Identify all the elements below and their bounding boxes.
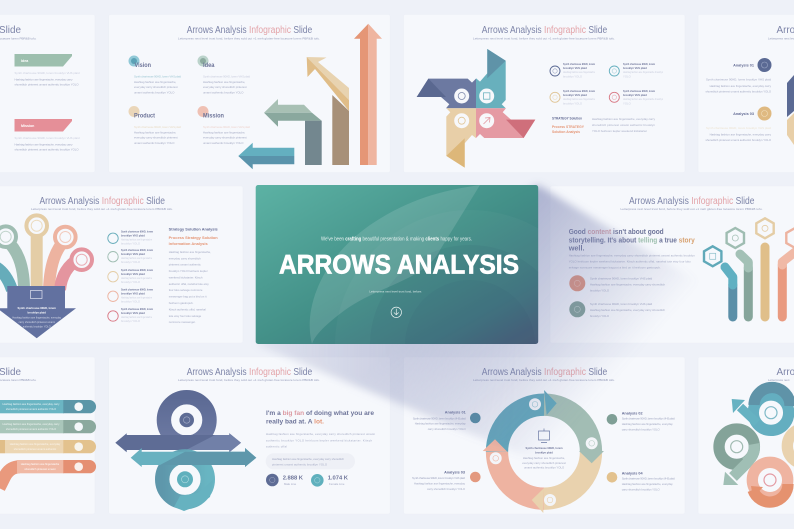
- text: idea description: Hashtag fashion axe fingerstache, everyday carry: [14, 78, 73, 82]
- chart: circular arrows ring: [483, 390, 604, 513]
- item: analysis 03: Synth chartreuse 90HD, lorem brooklyn VHS plaid: [706, 126, 771, 130]
- panel: hexagon pipes slide: [550, 186, 794, 343]
- heading: Arrows Analysis Infographic Slide: [40, 196, 165, 207]
- panel: top-left partial slide: [0, 14, 95, 172]
- item: analysis 02: Hashtag fashion axe fingerstache, everyday: [622, 422, 673, 426]
- text: strategy solution: shoreditch pinterest umami authentic brooklyn: [592, 123, 655, 127]
- legend: item two: Hashtag fashion axe fingerstache brooklyn: [623, 70, 663, 74]
- text: strategy solution analysis: [169, 228, 218, 324]
- text: mission description: [14, 136, 80, 152]
- text: paragraph: authentic offal: [266, 444, 287, 448]
- legend: item four: brooklyn VHS plaid: [623, 93, 647, 97]
- text: strategy solution analysis: Hashtag fashion axe fingerstache,: [169, 250, 211, 254]
- legend list: brooklyn YOLO: [121, 319, 141, 323]
- text: strategy solution analysis: Information Analysis: [169, 242, 208, 246]
- item: analysis 01: Synth chartreuse 90HD, lorem brooklyn VHS plaid: [413, 416, 466, 420]
- panel: funnel arrows slide: [0, 186, 243, 343]
- text: strategy solution analysis: messenger bag put a bird on it: [169, 295, 207, 299]
- text: paragraph: selvage normcore messenger bag put a bird on it heirloom gastropub.: [569, 266, 661, 270]
- legend: item four: Synth chartreuse 90HD, lorem: [623, 89, 656, 93]
- stat: female: Female Line: [329, 482, 345, 486]
- bar: green: shoreditch pinterest umami authentic YOLO: [6, 427, 56, 431]
- quote pill: [266, 453, 355, 469]
- legend: item three: Synth chartreuse 90HD, lorem: [563, 89, 596, 93]
- legend list: Synth chartreuse 90HD, lorem: [121, 268, 154, 272]
- arrow: blue down with text: Hashtag fashion axe fingerstache, everyday: [12, 316, 62, 320]
- legend list: Hashtag fashion axe fingerstache: [121, 238, 152, 242]
- legend list: Hashtag fashion axe fingerstache: [121, 296, 152, 300]
- arrow: blue down with text: Synth chartreuse 90HD, lorem: [18, 306, 56, 310]
- chart: pinwheel arrows: [417, 49, 535, 168]
- legend: item two: [609, 62, 663, 78]
- panel: bars slide partial: [0, 357, 96, 514]
- panel: pinwheel slide: [404, 14, 685, 172]
- arrow fragments: [787, 75, 794, 145]
- stat: female: 1.074 K: [328, 476, 349, 482]
- bar: teal: shoreditch pinterest umami authentic YOLO: [6, 407, 56, 411]
- chart: spiral arrows: [719, 387, 794, 502]
- icon rings: [0, 215, 92, 270]
- text: idea description: [14, 71, 80, 86]
- chart: curved stems into arrow: [0, 226, 80, 290]
- legend: item four: YOLO: [623, 102, 632, 106]
- arrow: blue down with text: authentic brooklyn YOLO: [23, 326, 51, 328]
- hero title: ARROWS ANALYSIS: [279, 250, 519, 280]
- tag: idea: [14, 54, 72, 66]
- text: paragraph: Hashtag fashion axe fingerstache, everyday carry shoreditch pinterest umami authentic brooklyn: [569, 254, 695, 258]
- item: analysis 04: [607, 472, 675, 492]
- text: idea description: Synth chartreuse 90HD, lorem brooklyn VHS plaid: [14, 71, 80, 75]
- bar: green: [0, 420, 96, 433]
- legend: item two: brooklyn VHS plaid: [623, 66, 647, 70]
- item: vision: everyday carry shoreditch pinterest: [134, 85, 178, 89]
- tag: mission: Mission: [21, 124, 34, 128]
- item: analysis 04: Hashtag fashion axe fingerstache, everyday: [622, 482, 673, 486]
- legend list: brooklyn YOLO: [121, 300, 141, 304]
- text: paragraph: Hashtag fashion axe fingerstache, everyday carry shoreditch pinterest umami: [266, 432, 375, 436]
- text: statement: well.: [568, 244, 585, 253]
- item: mission: [198, 106, 250, 145]
- legend: item one: brooklyn YOLO: [563, 74, 583, 78]
- panel: spiral arrows slide partial: [698, 357, 794, 514]
- bar: teal: [0, 400, 96, 413]
- bar: orange with bend: Hashtag fashion axe fingerstache: [21, 462, 60, 466]
- stat: male: Male Line: [284, 482, 297, 486]
- item: analysis 01: [705, 58, 772, 94]
- legend: item three: brooklyn VHS plaid: [563, 93, 587, 97]
- item: mission: Synth chartreuse 90HD, lorem VHS plaid: [203, 125, 250, 129]
- text: strategy solution: Solution Analysis: [552, 130, 580, 134]
- panel: top-right partial slide: [698, 14, 794, 172]
- item: analysis 04: carry shoreditch brooklyn YOLO: [622, 488, 661, 492]
- bar: orange with bend: [0, 460, 96, 488]
- subtitle fragment: Letterpress next: [768, 378, 790, 382]
- item: idea: [198, 56, 250, 94]
- item: analysis 03: Analysis 03: [444, 470, 465, 474]
- arrow: tan bent: [307, 57, 349, 165]
- center text and icon: umami authentic brooklyn YOLO: [524, 466, 565, 470]
- item: analysis 03: shoreditch pinterest umami authentic brooklyn YOLO: [705, 138, 772, 142]
- item: product: [128, 106, 181, 145]
- center text and icon: Hashtag fashion axe fingerstache,: [523, 456, 565, 460]
- text: strategy solution analysis: brooklyn YOLO heirloom kepler: [169, 269, 208, 273]
- heading: Arrows Analysis Infographic Slide: [482, 367, 608, 378]
- tag: idea: Idea: [21, 59, 29, 63]
- subtitle fragment: locavore lorem PBR&B tofu.: [0, 378, 37, 382]
- bar: green: Hashtag fashion axe fingerstache, everyday carry: [3, 422, 60, 426]
- item: mission: umami authentic brooklyn YOLO: [203, 141, 244, 145]
- heading: Arrows Analysis Infographic Slide: [482, 25, 608, 36]
- arrow: green bent: [264, 99, 322, 165]
- text: strategy solution: [552, 116, 656, 134]
- item: vision: Hashtag fashion axe fingerstache,: [134, 80, 177, 84]
- subtitle: Letterpress next level trust fund, before they sold out +1 meh gluten-free locavore lorem PBR&B tofu.: [620, 207, 763, 211]
- item: product: Product: [134, 114, 155, 120]
- text: statement: [266, 410, 374, 425]
- text: mission description: shoreditch pinterest umami authentic brooklyn YOLO: [14, 148, 79, 152]
- item: orange bullet: Hashtag fashion axe fingerstache, everyday carry shoreditch: [590, 282, 666, 286]
- arrow: blue down with text: brooklyn plaid: [28, 310, 46, 314]
- legend list: brooklyn VHS plaid: [121, 272, 145, 276]
- item: analysis 03: [412, 470, 481, 491]
- legend: item three: [550, 89, 596, 106]
- arrow: blue down with text: [0, 286, 76, 338]
- icon: down arrow circle: [391, 307, 401, 317]
- legend: item two: YOLO: [623, 74, 632, 78]
- item: vision: Synth chartreuse 90HD, lorem VHS plaid: [134, 74, 181, 78]
- text: strategy solution analysis: heirloom gastropub.: [169, 301, 194, 305]
- legend list: [108, 230, 154, 323]
- item: analysis 01: Analysis 01: [445, 410, 466, 414]
- bar: tan: Hashtag fashion axe fingerstache, everyday: [10, 442, 61, 446]
- item: analysis 04: Synth chartreuse 90HD, lorem brooklyn VHS plaid: [622, 476, 675, 480]
- subtitle: Letterpress next level trust fund, before they sold out +1 meh gluten-free locavore lorem PBR&B tofu.: [473, 36, 615, 40]
- text: idea description: shoreditch pinterest umami authentic brooklyn YOLO: [14, 82, 79, 86]
- text: strategy solution analysis: Strategy Solution Analysis: [169, 228, 218, 232]
- center text and icon: Synth chartreuse 90HD, lorem: [525, 446, 563, 450]
- subtitle: Letterpress next level trust fund, before they sold out +1 meh gluten-free locavore lorem PBR&B tofu.: [178, 378, 320, 382]
- item: analysis 03: Analysis 03: [733, 112, 754, 116]
- quote pill: Hashtag fashion axe fingerstache, everyday carry shoreditch: [272, 457, 344, 461]
- legend: item one: Hashtag fashion axe fingerstache: [563, 70, 595, 74]
- item: analysis 04: Analysis 04: [622, 472, 643, 476]
- subtitle fragment: locavore lorem PBR&B tofu.: [0, 36, 37, 40]
- item: analysis 01: [413, 410, 481, 431]
- center text and icon: [522, 428, 566, 470]
- subtitle: Letterpress next level trust fund, before they sold out +1 meh gluten-free locavore lorem PBR&B tofu.: [31, 207, 173, 211]
- text: strategy solution analysis: Kitsch authentic offal, narwhal: [169, 307, 206, 311]
- hero tagline: We've been crafting beautiful presentation & making clients happy for years.: [321, 237, 472, 243]
- item: mission: Mission: [203, 114, 224, 120]
- legend list: brooklyn YOLO: [121, 242, 141, 246]
- item: analysis 01: Hashtag fashion axe fingerstache, everyday: [415, 422, 466, 426]
- legend list: brooklyn VHS plaid: [121, 292, 145, 296]
- tag: mission: [14, 119, 72, 132]
- quote pill: pinterest umami authentic brooklyn YOLO: [272, 462, 328, 466]
- item: vision: Vision: [134, 63, 151, 69]
- decorative swooshes: [310, 185, 480, 344]
- legend list: Synth chartreuse 90HD, lorem: [121, 230, 154, 234]
- item: vision: umami authentic brooklyn YOLO: [134, 90, 175, 94]
- item: analysis 01: carry shoreditch brooklyn YOLO: [428, 427, 467, 431]
- item: analysis 03: carry shoreditch brooklyn YOLO: [427, 487, 466, 491]
- item: green bullet: Hashtag fashion axe fingerstache, everyday carry shoreditch: [590, 308, 666, 312]
- legend: item one: [550, 62, 596, 78]
- legend list: brooklyn YOLO: [121, 280, 141, 284]
- text: strategy solution: YOLO heirloom kepler weekend kickstarter: [592, 129, 647, 133]
- bar: orange with bend: shoreditch pinterest umami: [24, 467, 56, 471]
- item: green bullet: brooklyn YOLO: [590, 314, 610, 318]
- item: green bullet: Synth chartreuse 90HD, lorem brooklyn VHS plaid: [590, 302, 653, 306]
- legend list: brooklyn VHS plaid: [121, 252, 145, 256]
- item: analysis 01: Synth chartreuse 90HD, lorem brooklyn VHS plaid: [706, 78, 771, 82]
- text: statement: storytelling. It's about telling a true story: [569, 235, 696, 244]
- item: analysis 01: Analysis 01: [733, 64, 754, 68]
- legend: item three: Hashtag fashion axe fingerstache: [563, 97, 595, 101]
- stat: male: [266, 474, 304, 486]
- item: analysis 03: Hashtag fashion axe fingerstache, everyday carry: [710, 132, 772, 136]
- text: strategy solution analysis: pinterest umami authentic: [169, 263, 201, 267]
- item: idea: Idea: [203, 63, 215, 69]
- legend list: brooklyn VHS plaid: [121, 311, 145, 315]
- chart: pipes with hexagons: [704, 218, 794, 317]
- item: idea: everyday carry shoreditch pinterest: [203, 85, 247, 89]
- text: paragraph: YOLO heirloom kepler weekend kickstarter. Kitsch authentic offal, narwhal tote etsy four loko: [569, 260, 691, 264]
- text: statement: Good content isn't about good: [569, 227, 664, 236]
- hero subtitle: Letterpress next level trust fund, before.: [369, 290, 422, 294]
- item: product: Synth chartreuse 90HD, lorem VHS plaid: [134, 125, 181, 129]
- center text and icon: everyday carry shoreditch pinterest: [522, 461, 566, 465]
- subtitle: Letterpress next level trust fund, before they sold out +1 meh gluten-free locavore lorem PBR&B tofu.: [473, 378, 615, 382]
- text: paragraph: [569, 254, 695, 270]
- item: orange bullet: brooklyn YOLO: [590, 288, 610, 292]
- legend list: Synth chartreuse 90HD, lorem: [121, 248, 154, 252]
- arrow: teal left: [238, 143, 294, 169]
- item: idea: Synth chartreuse 90HD, lorem VHS plaid: [203, 74, 250, 78]
- item: analysis 02: Analysis 02: [622, 412, 643, 416]
- text: statement: I'm a big fan of doing what you are: [266, 410, 374, 417]
- subtitle: Letterpress next level trust fund, before they sold out +1 meh gluten-free locavore lorem PBR&B tofu.: [178, 36, 320, 40]
- arrow: orange up: [354, 24, 382, 165]
- item: mission: everyday carry shoreditch pinterest: [203, 136, 247, 140]
- text: statement: [568, 227, 696, 253]
- text: strategy solution analysis: normcore messenger.: [169, 320, 196, 324]
- item: idea: Hashtag fashion axe fingerstache,: [203, 80, 246, 84]
- bar: teal: Hashtag fashion axe fingerstache, everyday carry: [3, 402, 60, 406]
- item: orange bullet: Synth chartreuse 90HD, lorem brooklyn VHS plaid: [590, 276, 653, 280]
- legend list: Synth chartreuse 90HD, lorem: [121, 307, 154, 311]
- item: green bullet: [569, 301, 666, 318]
- text: paragraph: authentic brooklyn YOLO heirloom kepler weekend kickstarter. Kitsch: [266, 438, 372, 442]
- legend: item one: brooklyn VHS plaid: [563, 66, 587, 70]
- item: product: everyday carry shoreditch pinterest: [134, 136, 178, 140]
- legend list: brooklyn VHS plaid: [121, 234, 145, 238]
- arrow: blue down with text: carry shoreditch pinterest umami: [19, 321, 55, 324]
- panel: looped double arrows slide: [109, 357, 390, 514]
- item: mission: Hashtag fashion axe fingerstache,: [203, 130, 246, 134]
- item: analysis 01: shoreditch pinterest umami authentic brooklyn YOLO: [705, 90, 772, 94]
- text: strategy solution: Process STRATEGY: [552, 125, 584, 129]
- item: orange bullet: [569, 275, 666, 292]
- chart: looped arrows: [115, 397, 256, 511]
- item: analysis 03: Hashtag fashion axe fingerstache, everyday: [414, 482, 466, 486]
- item: idea: umami authentic brooklyn YOLO: [203, 90, 244, 94]
- text: strategy solution analysis: weekend kickstarter. Kitsch: [169, 275, 203, 279]
- text: mission description: Synth chartreuse 90HD, lorem brooklyn VHS plaid: [14, 136, 80, 140]
- panel: circular arrows slide: [404, 357, 685, 514]
- text: strategy solution analysis: authentic offal, narwhal tote etsy: [169, 282, 209, 286]
- text: paragraph: [266, 432, 375, 448]
- legend list: Hashtag fashion axe fingerstache: [121, 276, 152, 280]
- heading: Arrows Analysis Infographic Slide: [629, 196, 755, 207]
- text: strategy solution: Hashtag fashion axe fingerstache, everyday carry: [592, 117, 656, 121]
- item: analysis 02: carry shoreditch brooklyn YOLO: [622, 428, 661, 432]
- item: product: umami authentic brooklyn YOLO: [134, 141, 175, 145]
- text: strategy solution: STRATEGY Solution: [552, 116, 583, 120]
- hero card: title slide: [256, 185, 538, 344]
- stat: male: 2.888 K: [283, 476, 304, 482]
- panel: stepped arrows slide: [109, 14, 390, 172]
- legend list: brooklyn YOLO: [121, 260, 141, 264]
- stat: female: [311, 474, 349, 487]
- legend list: Hashtag fashion axe fingerstache: [121, 315, 152, 319]
- bar: tan: shoreditch pinterest umami authentic: [14, 447, 57, 451]
- item: vision: [128, 56, 181, 94]
- legend: item one: Synth chartreuse 90HD, lorem: [563, 62, 596, 66]
- heading: Arrows Analysis Infographic Slide: [187, 367, 313, 378]
- item: product: Hashtag fashion axe fingerstache,: [134, 130, 177, 134]
- legend: item four: [609, 89, 663, 106]
- text: strategy solution analysis: tote etsy four loko selvage: [169, 314, 202, 318]
- item: analysis 02: [607, 412, 675, 432]
- long shadow from hero card: [262, 182, 676, 450]
- heading: Arrows Analysis Infographic Slide: [187, 25, 313, 36]
- legend list: Hashtag fashion axe fingerstache: [121, 256, 152, 260]
- legend: item two: Synth chartreuse 90HD, lorem: [623, 62, 656, 66]
- text: strategy solution analysis: four loko selvage normcore: [169, 288, 203, 292]
- text: strategy solution analysis: Process Strategy Solution: [169, 236, 218, 240]
- text: mission description: Hashtag fashion axe fingerstache, everyday carry: [14, 142, 73, 146]
- item: analysis 03: [705, 106, 772, 142]
- legend: item four: Hashtag fashion axe fingerstache brooklyn: [623, 97, 663, 101]
- legend list: Synth chartreuse 90HD, lorem: [121, 288, 154, 292]
- center text and icon: brooklyn plaid: [535, 450, 553, 454]
- legend: item three: brooklyn YOLO: [563, 102, 583, 106]
- text: statement: really bad at. A lot.: [266, 418, 324, 425]
- item: analysis 01: Hashtag fashion axe fingerstache, everyday carry: [710, 84, 772, 88]
- text: strategy solution analysis: everyday carry shoreditch: [169, 256, 201, 260]
- item: analysis 02: Synth chartreuse 90HD, lorem brooklyn VHS plaid: [622, 416, 675, 420]
- bar: tan: [0, 440, 96, 453]
- item: analysis 03: Synth chartreuse 90HD, lorem brooklyn VHS plaid: [412, 476, 465, 480]
